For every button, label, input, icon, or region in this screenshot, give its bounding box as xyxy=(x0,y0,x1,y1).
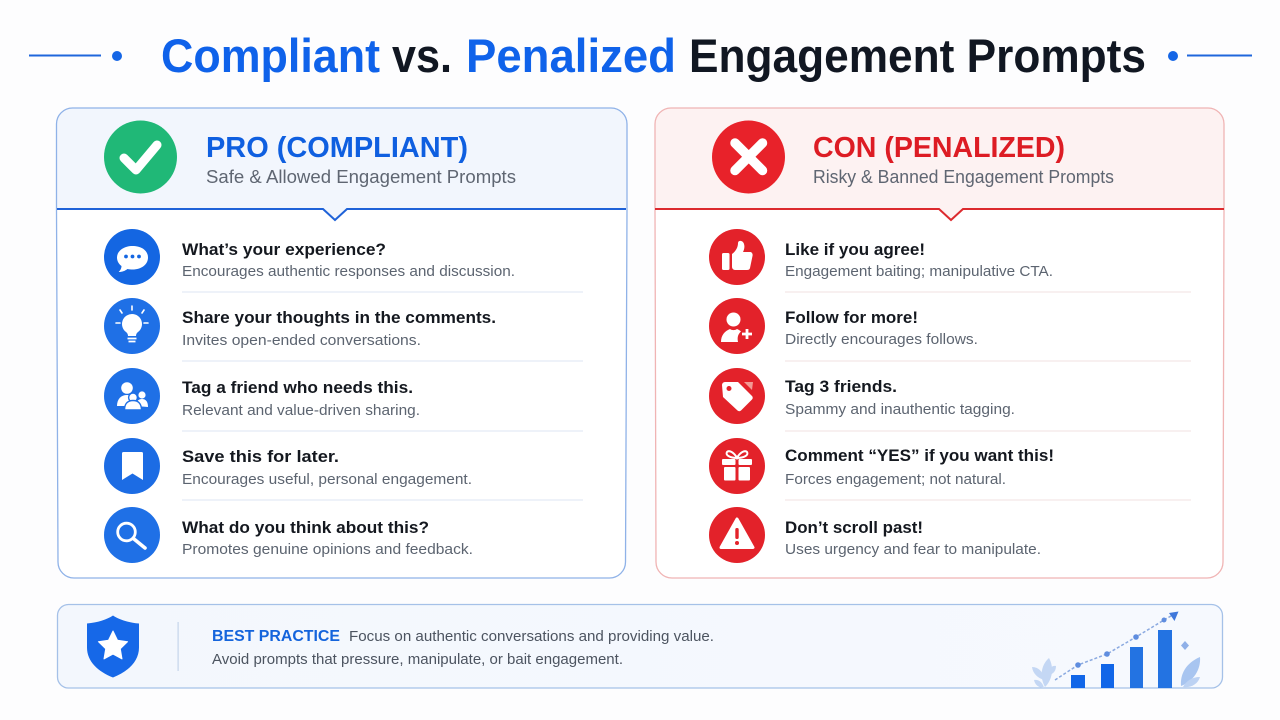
icon: thumbs up xyxy=(709,229,765,285)
title: vs. xyxy=(392,29,452,82)
item: save: Save this for later. xyxy=(182,447,339,466)
icon: people xyxy=(104,368,160,424)
icon: gift xyxy=(709,438,765,494)
pro subheading: Safe & Allowed Engagement Prompts xyxy=(206,167,516,187)
icon: green check xyxy=(104,120,177,194)
item: follow xyxy=(709,298,978,354)
item: like: Engagement baiting; manipulative CTA. xyxy=(785,264,1053,280)
panel: con xyxy=(655,108,1224,578)
panel: best practice xyxy=(58,604,1222,688)
icon: light bulb xyxy=(104,298,160,354)
item: comment yes: Comment “YES” if you want this! xyxy=(785,446,1054,465)
item: like xyxy=(709,229,1053,285)
best practice text: Avoid prompts that pressure, manipulate, or bait engagement. xyxy=(212,652,623,668)
best practice text xyxy=(212,629,714,668)
icon: red cross xyxy=(712,120,785,194)
con subheading: Risky & Banned Engagement Prompts xyxy=(813,167,1114,187)
item: follow: Follow for more! xyxy=(785,308,918,327)
title ornament: right xyxy=(1168,51,1252,61)
item: tag a friend xyxy=(104,368,420,424)
con heading: CON (PENALIZED) xyxy=(813,132,1065,164)
title: Compliant xyxy=(161,29,380,82)
icon: bookmark xyxy=(104,438,160,494)
title xyxy=(161,29,1146,82)
item: comment yes: Forces engagement; not natural. xyxy=(785,472,1006,488)
item: tag 3 xyxy=(709,368,1015,424)
item: do not scroll: Uses urgency and fear to manipulate. xyxy=(785,542,1041,558)
item: like: Like if you agree! xyxy=(785,240,925,259)
icon: shield with star xyxy=(87,616,139,678)
item: tag 3: Tag 3 friends. xyxy=(785,377,897,396)
icon: magnifier xyxy=(104,507,160,563)
item: thoughts xyxy=(104,298,496,354)
item: what do you think: Promotes genuine opinions and feedback. xyxy=(182,542,473,558)
icon: price tag xyxy=(709,368,765,424)
item: comment yes xyxy=(709,438,1054,494)
panel: pro xyxy=(56,108,627,578)
item: do not scroll: Don’t scroll past! xyxy=(785,518,923,537)
best practice label: BEST PRACTICE xyxy=(212,628,340,645)
item: thoughts: Invites open-ended conversations. xyxy=(182,333,421,349)
item: do not scroll xyxy=(709,507,1041,563)
icon: warning xyxy=(709,507,765,563)
pro heading: PRO (COMPLIANT) xyxy=(206,132,468,164)
title: Penalized xyxy=(466,29,676,82)
best practice text: Focus on authentic conversations and providing value. xyxy=(349,629,714,645)
item: thoughts: Share your thoughts in the comments. xyxy=(182,308,496,327)
title: Engagement Prompts xyxy=(689,29,1146,82)
icon: chat bubble xyxy=(104,229,160,285)
item: tag 3: Spammy and inauthentic tagging. xyxy=(785,402,1015,418)
item: what do you think: What do you think about this? xyxy=(182,518,429,537)
item: tag a friend: Relevant and value-driven sharing. xyxy=(182,403,420,419)
icon: add user xyxy=(709,298,765,354)
item: experience: What’s your experience? xyxy=(182,240,386,259)
item: what do you think xyxy=(104,507,473,563)
item: follow: Directly encourages follows. xyxy=(785,332,978,348)
item: tag a friend: Tag a friend who needs this. xyxy=(182,378,413,397)
item: save xyxy=(104,438,472,494)
item: experience: Encourages authentic responses and discussion. xyxy=(182,264,515,280)
item: save: Encourages useful, personal engagement. xyxy=(182,472,472,488)
title ornament: left xyxy=(29,51,122,61)
growth chart illustration xyxy=(1032,612,1200,688)
item: experience xyxy=(104,229,515,285)
